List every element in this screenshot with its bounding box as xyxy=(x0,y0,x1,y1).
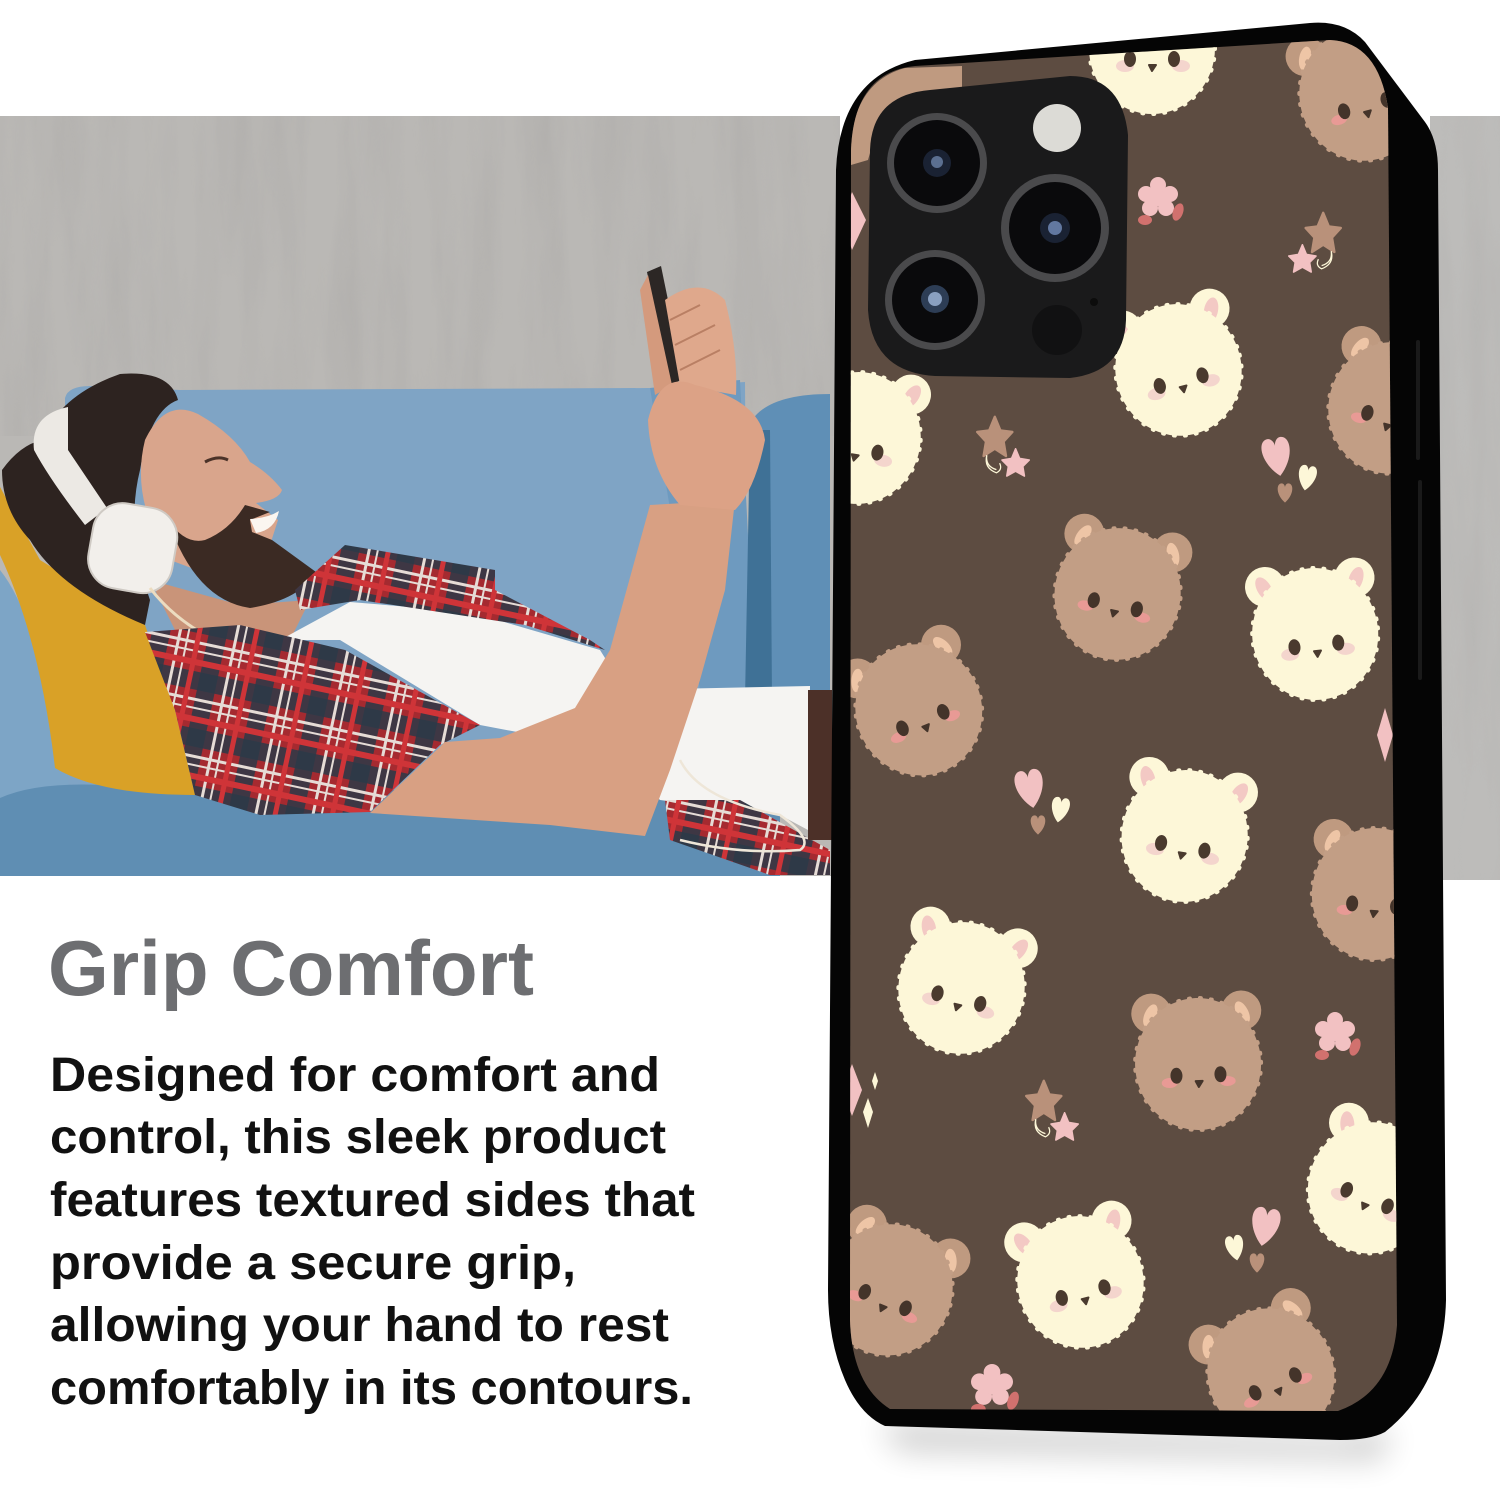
lens bottom left xyxy=(885,250,985,350)
back of head and hair xyxy=(2,374,178,625)
printed back xyxy=(850,40,1397,1411)
body text: features textured sides that xyxy=(50,1174,695,1227)
cream bears xyxy=(850,47,1396,1411)
stars xyxy=(977,213,1341,1140)
lens right xyxy=(1001,174,1109,282)
face xyxy=(141,410,282,590)
beard xyxy=(168,505,316,608)
camera plate xyxy=(868,76,1128,378)
body text: comfortably in its contours. xyxy=(50,1362,693,1415)
camera module xyxy=(868,76,1128,378)
body text xyxy=(50,1049,695,1415)
body text: control, this sleek product xyxy=(50,1111,666,1164)
neck xyxy=(150,580,310,640)
phone in hand xyxy=(647,266,684,386)
case outer body xyxy=(828,23,1446,1440)
sofa xyxy=(0,380,830,876)
pillow xyxy=(0,487,195,795)
right wall sliver xyxy=(1430,116,1500,880)
flash xyxy=(1033,104,1081,152)
phone case xyxy=(828,22,1446,1440)
t-shirt xyxy=(280,602,810,830)
earphone cable xyxy=(680,760,804,851)
side buttons xyxy=(1416,340,1422,680)
flowers xyxy=(971,177,1363,1414)
plaid shirt collar and torso xyxy=(145,545,830,875)
hands xyxy=(640,275,765,510)
brown bears xyxy=(850,40,1394,1411)
lifestyle photo: man on sofa xyxy=(0,116,1500,880)
headphones xyxy=(34,407,270,660)
sparkles xyxy=(842,192,1393,1128)
jeans xyxy=(808,690,832,840)
brown bear behind camera xyxy=(851,66,962,165)
body text: Designed for comfort and xyxy=(50,1049,660,1102)
body text: provide a secure grip, xyxy=(50,1237,576,1290)
sensor xyxy=(1032,305,1082,355)
hearts xyxy=(1013,436,1318,1273)
lens top left xyxy=(887,113,987,213)
smile xyxy=(250,511,279,533)
wall xyxy=(0,116,840,876)
body text: allowing your hand to rest xyxy=(50,1299,669,1352)
arm xyxy=(370,500,735,836)
closed eye xyxy=(205,458,228,462)
pattern background xyxy=(840,30,1410,1420)
heading: Grip Comfort xyxy=(48,924,534,1012)
microphone dot xyxy=(1090,298,1098,306)
phone shadow xyxy=(880,1425,1390,1458)
